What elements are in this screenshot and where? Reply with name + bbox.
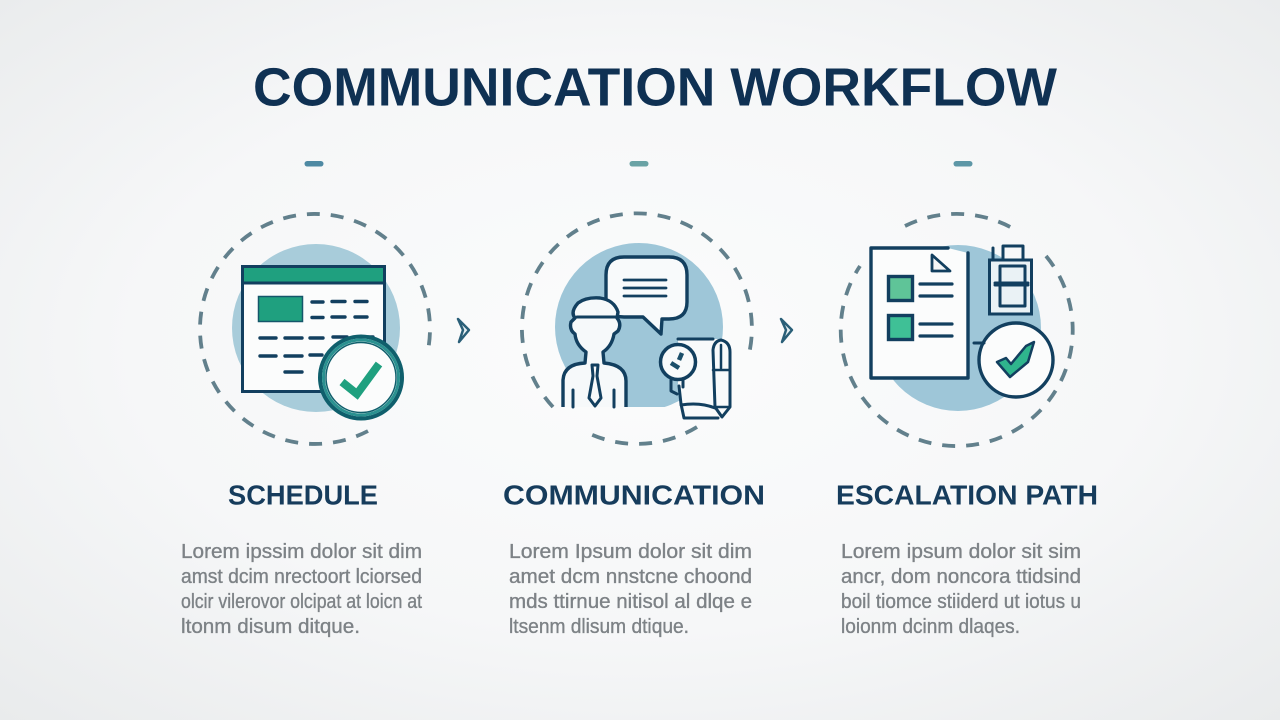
title: COMMUNICATION WORKFLOW (253, 58, 1057, 118)
icon: person with speech bubble and notebook (522, 213, 752, 444)
text block: schedule description: amst dcim nrectoort lciorsed (181, 566, 422, 588)
text block: communication description: Lorem Ipsum dolor sit dim (509, 541, 752, 563)
heading: schedule: SCHEDULE (228, 480, 378, 510)
text block: schedule description: olcir vilerovor olcipat at loicn at (181, 591, 422, 613)
text block: communication description: mds ttirnue nitisol al dlqe e (509, 591, 752, 613)
icon: calendar with check badge (200, 214, 430, 444)
icon: checklist with clipboard and check badge (841, 214, 1073, 446)
arrow: communication to escalation path (781, 319, 792, 342)
panel: schedule (181, 161, 430, 638)
heading: escalation path: ESCALATION PATH (836, 480, 1098, 510)
text block: schedule description: ltonm disum ditque. (181, 616, 360, 638)
step marker (630, 161, 648, 166)
step marker (304, 161, 324, 166)
text block: escalation path description: boil tiomce stiiderd ut iotus u (841, 591, 1081, 613)
text block: escalation path description (841, 541, 1081, 638)
text block: escalation path description: loionm dcinm dlaqes. (841, 616, 1020, 638)
text block: escalation path description: ancr, dom noncora ttidsind (841, 566, 1081, 588)
text block: escalation path description: Lorem ipsum dolor sit sim (841, 541, 1081, 563)
text block: schedule description (181, 541, 422, 638)
text block: schedule description: Lorem ipssim dolor sit dim (181, 541, 422, 563)
arrow: schedule to communication (458, 319, 469, 342)
text block: communication description (509, 541, 752, 638)
step marker (954, 161, 972, 166)
text block: communication description: amet dcm nnstcne choond (509, 566, 752, 588)
panel: escalation path (836, 161, 1098, 638)
panel: communication (503, 161, 765, 638)
heading: communication: COMMUNICATION (503, 480, 765, 510)
text block: communication description: ltsenm dlisum dtique. (509, 616, 689, 638)
